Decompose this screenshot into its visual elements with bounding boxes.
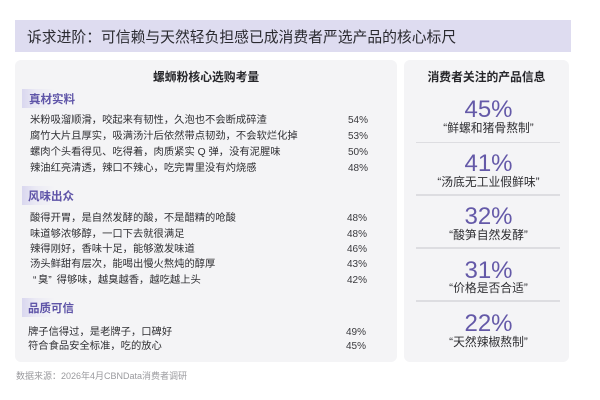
stat 41%: 41% xyxy=(464,150,513,177)
row: 50% xyxy=(348,147,368,158)
stat 22%: “天然辣椒熬制” xyxy=(449,335,528,349)
section heading: 风味出众 xyxy=(28,190,74,202)
row: 53% xyxy=(348,131,368,142)
section heading xyxy=(22,298,82,317)
stat 32%: “酸笋自然发酵” xyxy=(449,228,528,242)
section: real ingredients xyxy=(22,89,368,174)
row: 48% xyxy=(347,213,367,224)
title text: 诉求进阶：可信赖与天然轻负担感已成消费者严选产品的核心标尺 xyxy=(27,30,456,46)
row xyxy=(30,212,367,224)
stat 22%: 22% xyxy=(464,310,513,337)
row: 54% xyxy=(348,115,368,126)
row xyxy=(30,162,368,174)
row: 42% xyxy=(347,275,367,286)
row: 48% xyxy=(347,229,367,240)
row xyxy=(30,146,368,158)
row: 48% xyxy=(348,163,368,174)
row: 酸得开胃，是自然发酵的酸，不是醋精的呛酸 xyxy=(30,213,236,224)
stat 45%: “鲜螺和猪骨熬制” xyxy=(443,121,534,135)
panel heading: 消费者关注的产品信息 xyxy=(428,70,545,84)
row: 味道够浓够醇，一口下去就很满足 xyxy=(30,229,184,240)
stat 32%: 32% xyxy=(464,203,513,230)
row: 米粉吸溜顺滑，咬起来有韧性，久泡也不会断成碎渣 xyxy=(30,115,267,126)
row xyxy=(28,326,366,338)
row xyxy=(28,340,366,352)
section heading: 真材实料 xyxy=(29,94,75,106)
stat 41%: “汤底无工业假鲜味” xyxy=(437,175,540,189)
row xyxy=(33,274,367,286)
stat 45%: 45% xyxy=(464,96,513,123)
section: outstanding flavor xyxy=(22,186,367,286)
row: 辣得刚好，香味十足，能够激发味道 xyxy=(30,244,195,255)
panel: core purchase considerations xyxy=(15,60,397,362)
stat 31%: 31% xyxy=(464,257,513,284)
row xyxy=(30,243,367,255)
section heading xyxy=(22,186,82,205)
section: trustworthy quality xyxy=(22,298,366,352)
row: 49% xyxy=(346,327,366,338)
row: 牌子信得过，是老牌子，口碑好 xyxy=(28,327,172,338)
row: 腐竹大片且厚实，吸满汤汁后依然带点韧劲，不会软烂化掉 xyxy=(30,131,298,142)
section heading xyxy=(22,89,82,108)
row xyxy=(30,258,367,270)
stat 31%: “价格是否合适” xyxy=(449,281,528,295)
row: 45% xyxy=(346,341,366,352)
row: 符合食品安全标准，吃的放心 xyxy=(28,341,162,352)
row: 汤头鲜甜有层次，能喝出慢火熬炖的醇厚 xyxy=(30,259,215,270)
stat 32% xyxy=(449,203,528,242)
stat 45% xyxy=(443,96,534,135)
row: 辣油红亮清透，辣口不辣心，吃完胃里没有灼烧感 xyxy=(30,163,257,174)
row: 螺肉个头看得见、吃得着，肉质紧实 Q 弹，没有泥腥味 xyxy=(30,147,281,158)
section heading: 品质可信 xyxy=(28,302,74,314)
stat 31% xyxy=(449,257,528,295)
row: 43% xyxy=(347,259,367,270)
stat 22% xyxy=(449,310,528,349)
row xyxy=(30,228,367,240)
stat 41% xyxy=(437,150,540,189)
source note: 数据来源：2026年4月CBNData消费者调研 xyxy=(16,371,187,381)
row: 46% xyxy=(347,244,367,255)
panel: product information consumers care about xyxy=(404,60,569,362)
panel heading: 螺蛳粉核心选购考量 xyxy=(153,70,259,84)
row xyxy=(30,114,368,126)
row: “臭”得够味，越臭越香，越吃越上头 xyxy=(33,275,201,286)
title banner xyxy=(15,20,571,52)
